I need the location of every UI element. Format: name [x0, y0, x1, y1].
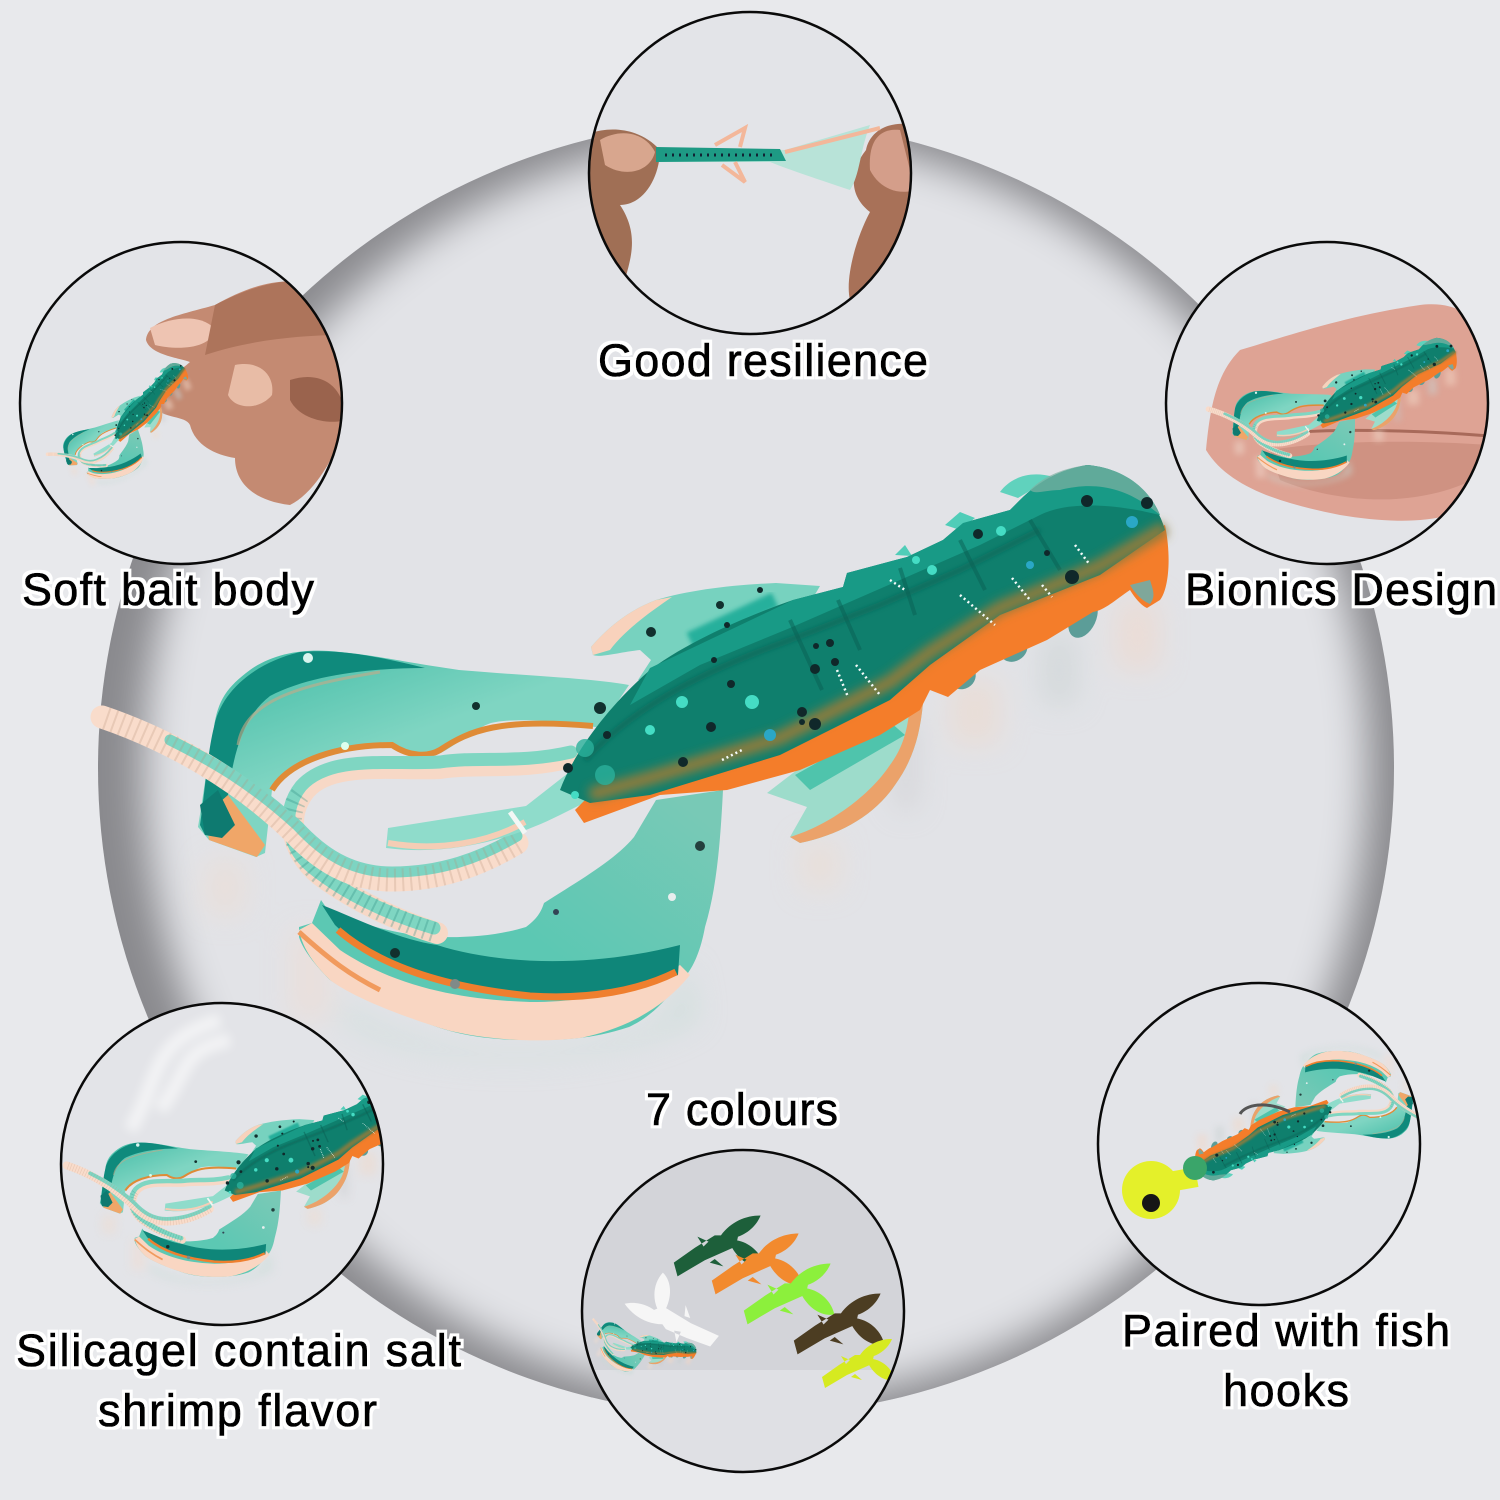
label: soft bait body: Soft bait body [22, 564, 314, 615]
ring [61, 1003, 383, 1325]
jig head [1122, 1161, 1180, 1219]
label: good resilience: Good resilience [598, 335, 928, 386]
ring [1166, 242, 1488, 564]
panel: silicagel salt shrimp flavor [60, 1002, 384, 1326]
label: silicagel line 1: Silicagel contain salt [16, 1325, 461, 1376]
ring [20, 242, 342, 564]
panel: soft bait body [20, 242, 350, 564]
photo: seven colour lures [577, 1150, 910, 1400]
large gradient disc [90, 110, 1400, 1420]
ring [582, 1150, 904, 1472]
photo: lure on jig head [1122, 1046, 1435, 1219]
label: 7 colours: 7 colours [646, 1084, 838, 1135]
photo: hand holding lure [33, 281, 350, 505]
label: silicagel line 2: shrimp flavor [98, 1385, 377, 1436]
photo: stretched lure between fingers [580, 124, 915, 300]
label: paired line 1: Paired with fish [1122, 1305, 1450, 1356]
panel: bionics design [1166, 242, 1495, 564]
label: bionics design: Bionics Design [1185, 564, 1497, 615]
main lure [102, 465, 1169, 1061]
photo: lure with scent smoke [62, 1017, 381, 1277]
label: paired line 2: hooks [1223, 1365, 1349, 1416]
ring [589, 12, 911, 334]
photo: hand holding lure [1205, 304, 1495, 521]
panel: 7 colours [577, 1150, 910, 1472]
ring [1098, 983, 1420, 1305]
panel: paired with fish hooks [1098, 983, 1435, 1305]
panel: good resilience [580, 12, 915, 334]
